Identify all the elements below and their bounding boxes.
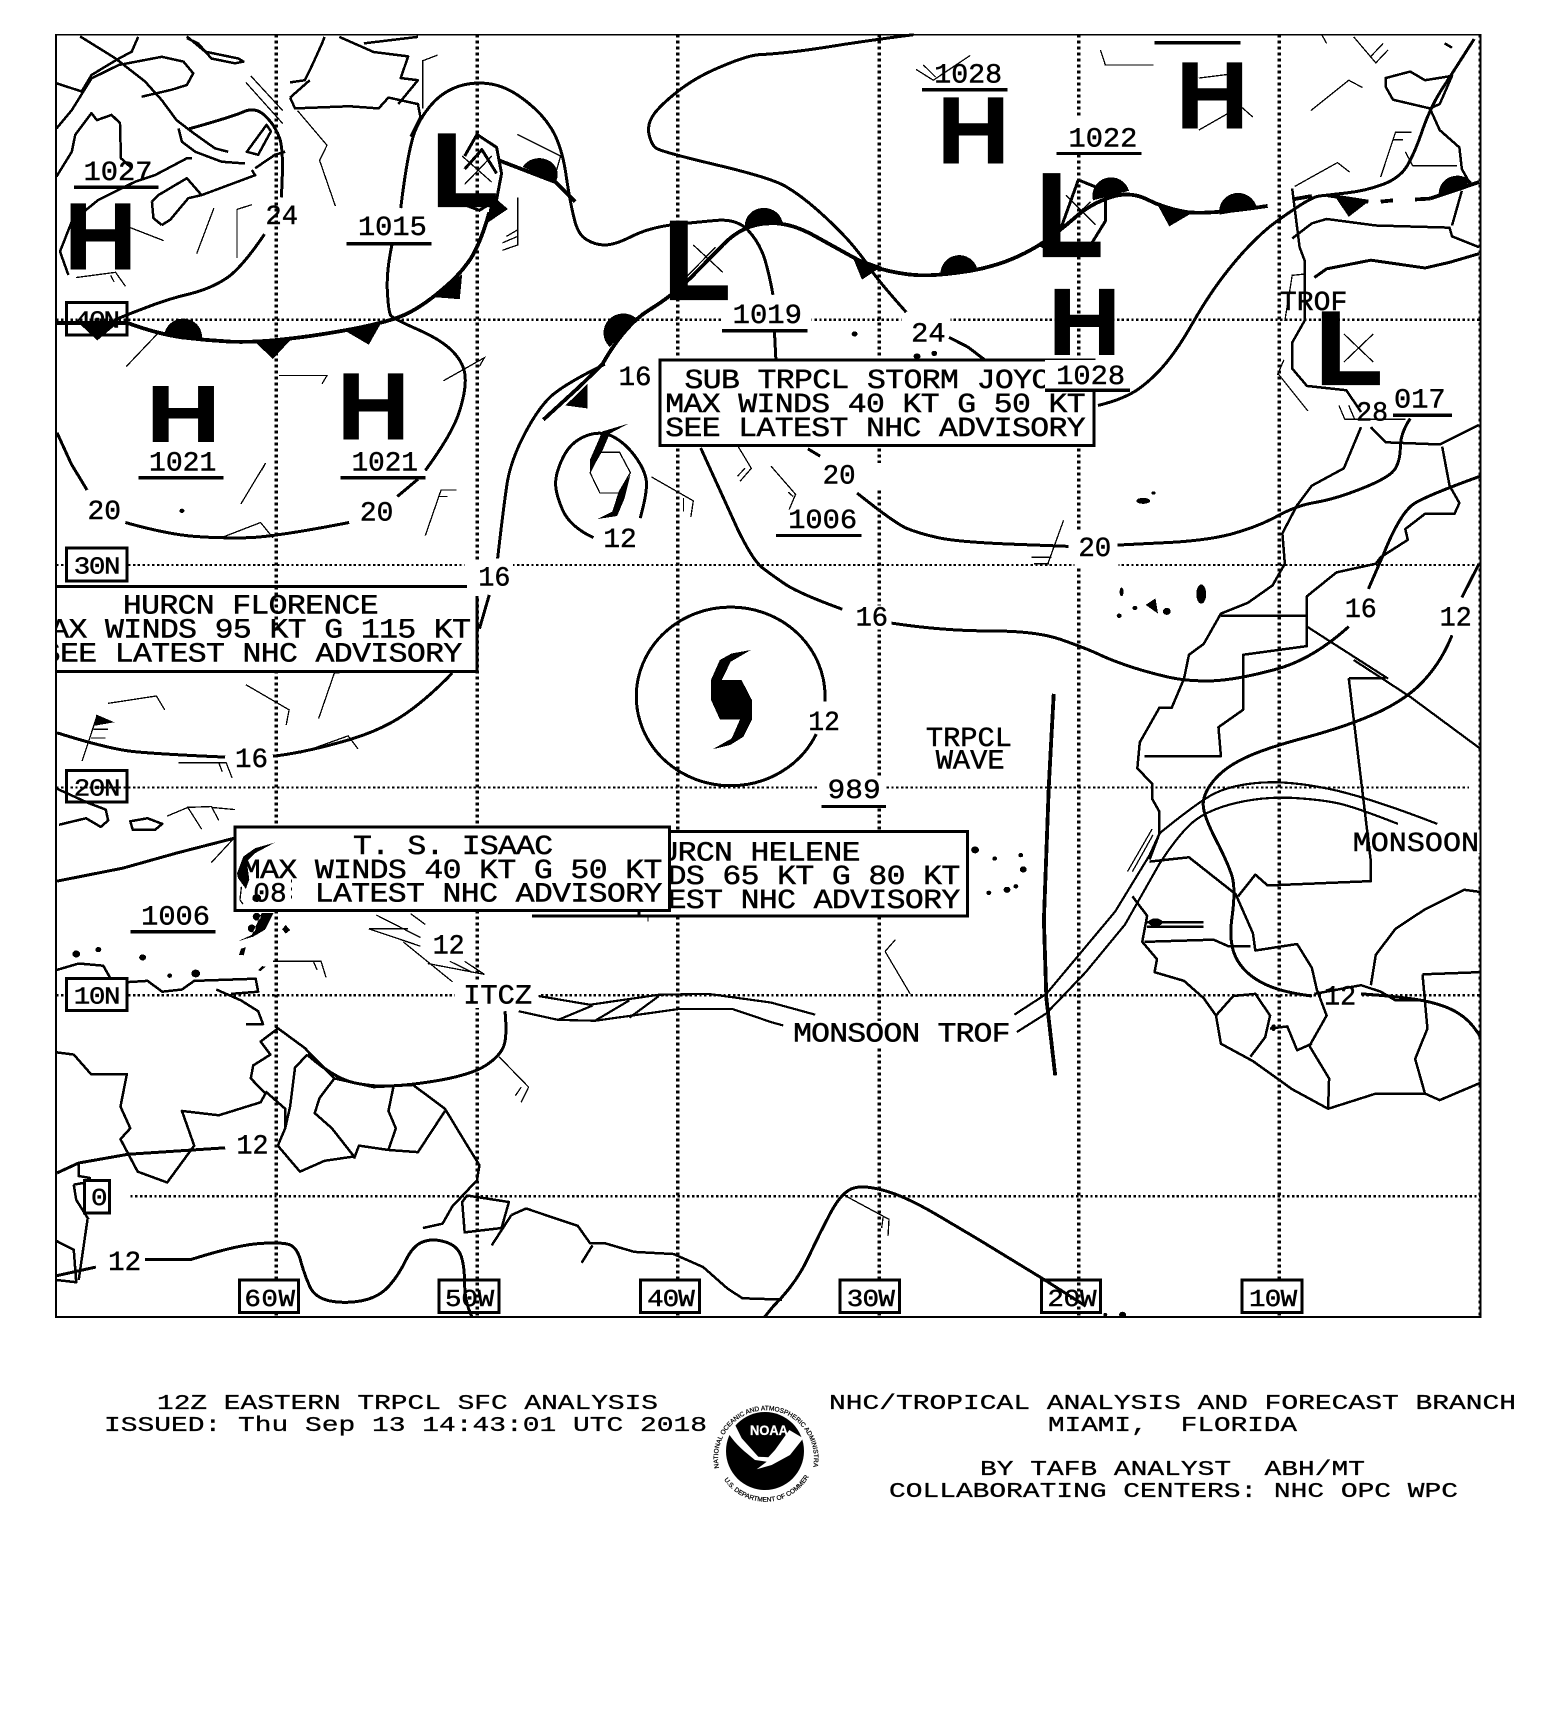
isobar 16 central (57, 364, 605, 757)
warm front semicircles (165, 158, 1472, 347)
1028 north: 1028 (934, 60, 1002, 91)
monsoon trof: MONSOON TROF (793, 1019, 1010, 1050)
H high 1027: H (64, 185, 137, 289)
atlantic islands (72, 331, 1276, 1318)
1022: 1022 (1068, 124, 1137, 155)
isobar value labels: 16 (619, 363, 652, 394)
60W: 60W (244, 1286, 295, 1313)
advisory box: tropical storm isaac: 08 (253, 879, 287, 910)
40W: 40W (647, 1286, 695, 1313)
isobar value labels: 20 (360, 498, 393, 529)
20W: 20W (1047, 1286, 1097, 1313)
hurricane helene symbol (711, 650, 752, 749)
advisory box: tropical storm isaac: LATEST NHC ADVISORY (315, 879, 662, 910)
isobar 20 to 16 central (701, 448, 1349, 681)
H high 1028 north: H (937, 79, 1009, 184)
1028 central: 1028 (1056, 361, 1125, 392)
advisory box: subtropical storm joyce: MAX WINDS 40 KT G 50 KT (665, 389, 1086, 421)
0: 0 (91, 1185, 107, 1212)
icon: NOAA logo (713, 1406, 819, 1502)
advisory box: subtropical storm joyce: SUB TRPCL STORM JOYCE (684, 366, 1068, 397)
dashed front east (1292, 182, 1479, 202)
icon: NOAA logo: NATIONAL OCEANIC AND ATMOSPHERIC ADMINISTRATION (713, 1406, 819, 1468)
advisory box: hurricane florence (32, 587, 477, 671)
isobars (57, 35, 1481, 1317)
H high 1021 east: H (337, 355, 410, 459)
30N (66, 548, 127, 581)
isobar value labels: 16 (235, 745, 268, 776)
isobar loop around low (401, 83, 776, 360)
isobar value labels: 12 (108, 1248, 141, 1279)
isobar value labels: 12 (808, 708, 840, 739)
isobar 1028 ridge (1098, 39, 1474, 405)
isobar value labels: 12 (433, 931, 465, 962)
europe and africa coast (1132, 43, 1481, 1109)
L low iberia: L (1316, 289, 1382, 406)
isobar 12 south (57, 1240, 472, 1317)
wind barbs (76, 35, 1457, 1236)
location: MIAMI, FLORIDA (1048, 1415, 1298, 1438)
isobar 12 east africa (1203, 564, 1481, 1037)
monsoon east: MONSOON (1353, 828, 1479, 859)
isobar value labels: 20 (88, 497, 121, 528)
isobar north central (648, 35, 985, 360)
low pressure centres (432, 111, 1382, 406)
isobar value labels: 12 (237, 1131, 268, 1162)
isobar value labels: 12 (603, 525, 637, 556)
issuing branch: NHC/TROPICAL ANALYSIS AND FORECAST BRANCH (829, 1393, 1516, 1416)
H high 1028 central: H (1048, 271, 1121, 375)
40W (641, 1280, 700, 1313)
isobar value labels: 16 (1345, 595, 1377, 626)
30N: 30N (74, 553, 120, 581)
advisory box: hurricane florence: HURCN FLORENCE (123, 591, 379, 622)
H high north east: H (1176, 44, 1248, 148)
50W (439, 1280, 499, 1313)
isobar 24 west (116, 110, 282, 320)
itcz: ITCZ (463, 981, 532, 1012)
advisory box: hurricane florence: SEE LATEST NHC ADVISORY (42, 639, 462, 670)
isobar value labels: 20 (823, 461, 856, 492)
1006 west: 1006 (141, 902, 210, 933)
1006 central: 1006 (788, 506, 857, 537)
fronts (56, 158, 1479, 420)
0 (85, 1180, 110, 1213)
isobar south east (765, 1187, 1086, 1317)
1021 east: 1021 (352, 448, 418, 479)
isobar value labels: 20 (1078, 533, 1111, 565)
isobar 12 west (57, 1148, 225, 1173)
joyce 12 isobar (556, 433, 646, 538)
isobar value labels: 28 (1356, 398, 1388, 429)
10W: 10W (1249, 1286, 1297, 1313)
loop around eastern low (1061, 180, 1105, 245)
1027: 1027 (84, 157, 152, 189)
central stationary front (543, 195, 1268, 420)
isobar value labels: 24 (911, 319, 946, 350)
10N: 10N (74, 983, 120, 1011)
feature labels (463, 287, 1479, 1050)
low centre x markers (462, 156, 1373, 362)
40N: 40N (75, 307, 120, 335)
isobar value labels: 24 (266, 202, 298, 233)
advisory box: subtropical storm joyce (660, 360, 1094, 445)
50W: 50W (445, 1286, 494, 1313)
caribbean and south america coast (57, 789, 782, 1300)
advisory box: hurricane florence: MAX WINDS 95 KT G 115 KT (32, 615, 471, 646)
helene 12 isobar circle (636, 607, 825, 786)
isobar east of 1021 high (387, 245, 465, 497)
advisory box: subtropical storm joyce: SEE LATEST NHC ADVISORY (665, 413, 1086, 444)
tropical wave: TRPCL (926, 723, 1012, 755)
1015: 1015 (358, 212, 427, 244)
pressure labels (74, 43, 1452, 933)
underline north east (1155, 41, 1241, 45)
advisory box: tropical storm isaac (235, 827, 670, 971)
cold front triangles (79, 195, 1368, 408)
high pressure centres (64, 44, 1248, 459)
tropical wave (926, 723, 1012, 777)
icon: NOAA logo: U.S. DEPARTMENT OF COMMERCE (724, 1475, 809, 1502)
isaac storm symbol (237, 843, 290, 971)
isobar to isaac (57, 838, 236, 881)
advisory box: tropical storm isaac: T. S. ISAAC (353, 832, 553, 863)
30W: 30W (847, 1286, 895, 1313)
collaborating centers: COLLABORATING CENTERS: NHC OPC WPC (889, 1481, 1458, 1504)
loop around western low (462, 134, 502, 210)
1021 west: 1021 (149, 448, 216, 479)
warm front segment (499, 160, 575, 202)
20N: 20N (74, 775, 120, 803)
isobar 20 west (57, 433, 349, 538)
isobar value labels (88, 202, 1472, 1279)
40N (66, 303, 127, 335)
advisory box: hurricane helene: HURCN HELENE (641, 838, 860, 869)
product title: 12Z EASTERN TRPCL SFC ANALYSIS (157, 1393, 658, 1416)
1017: 017 (1394, 385, 1446, 416)
latitude and longitude tags (66, 303, 1302, 1313)
analyst: BY TAFB ANALYST ABH/MT (980, 1459, 1365, 1482)
advisory box: tropical storm isaac: MAX WINDS 40 KT G 50 KT (242, 856, 662, 887)
icon: NOAA logo: NOAA (750, 1422, 788, 1438)
issue time: ISSUED: Thu Sep 13 14:43:01 UTC 2018 (104, 1415, 707, 1438)
10W (1242, 1280, 1302, 1313)
latitude longitude grid (56, 35, 1481, 1317)
advisory box: hurricane helene: SEE LATEST NHC ADVISORY (540, 885, 960, 917)
tropical storm joyce symbol (590, 424, 630, 519)
isobar value labels: 12 (1324, 982, 1356, 1013)
989: 989 (828, 775, 881, 807)
north america coast (57, 36, 420, 275)
isobar value labels: 16 (856, 603, 888, 634)
advisory box: hurricane helene (532, 831, 968, 917)
western cold front (56, 212, 489, 342)
isobar 20 east (808, 254, 1481, 589)
isobar value labels: 16 (478, 563, 510, 594)
coastlines and borders (57, 36, 1481, 1318)
trof iberia: TROF (1280, 287, 1347, 319)
isobar value labels: 12 (1440, 603, 1472, 634)
tropical wave axis (1044, 694, 1055, 1075)
advisory box: hurricane helene: MAX WINDS 65 KT G 80 KT (540, 862, 960, 893)
20W (1041, 1280, 1100, 1313)
20N (66, 771, 127, 803)
L low central: L (664, 199, 730, 324)
monsoon trough lines (519, 782, 1437, 1032)
H high 1021 west: H (147, 369, 220, 458)
L low west: L (432, 111, 498, 228)
10N (66, 979, 127, 1011)
tropical wave: WAVE (936, 746, 1005, 777)
isobar 12 itcz (307, 1011, 506, 1086)
1019: 1019 (733, 301, 802, 332)
L low east: L (1037, 149, 1103, 282)
30W (840, 1280, 899, 1313)
